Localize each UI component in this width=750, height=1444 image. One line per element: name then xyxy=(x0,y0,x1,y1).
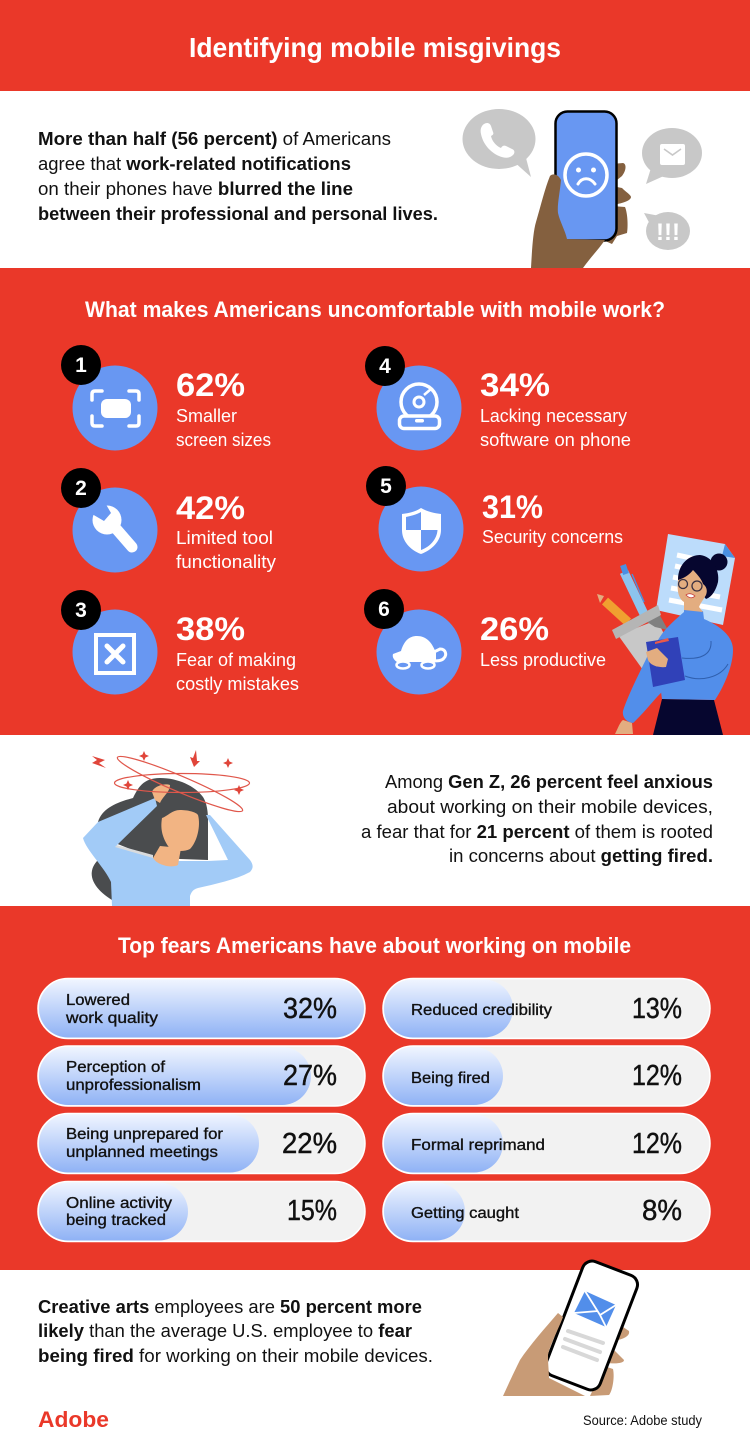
item 5: security concerns: 31% xyxy=(482,489,543,525)
creative arts text block: Creative arts employees are 50 percent more xyxy=(38,1296,422,1317)
bar: formal reprimand: Formal reprimand xyxy=(411,1137,545,1154)
panel: uncomfortable with mobile work xyxy=(0,268,750,735)
icon: hair bun and back hair xyxy=(678,554,728,599)
item 3: fear of costly mistakes: costly mistakes xyxy=(176,673,299,694)
bar: reduced credibility: 13% xyxy=(632,993,682,1025)
bar: formal reprimand: 12% xyxy=(632,1128,682,1160)
icon: left arm xyxy=(623,655,668,723)
bar: lowered work quality xyxy=(38,978,365,1038)
item 3: fear of costly mistakes: 38% xyxy=(176,611,245,647)
icon: cup xyxy=(612,605,672,670)
item 1: smaller screen sizes: 1 xyxy=(75,354,87,377)
item 4: lacking software: Lacking necessary xyxy=(480,405,628,426)
bar: being unprepared: Being unprepared for xyxy=(66,1126,223,1143)
item 2: limited tool functionality: Limited tool xyxy=(176,527,273,548)
bar: lowered work quality: Lowered xyxy=(66,992,130,1009)
bar: reduced credibility: Reduced credibility xyxy=(411,1002,552,1019)
bar: being fired: Being fired xyxy=(411,1070,490,1087)
bar: being fired: 12% xyxy=(632,1060,682,1092)
icon: orbit rings and sparks xyxy=(92,750,250,818)
item 2: limited tool functionality: functionality xyxy=(176,551,277,572)
header band xyxy=(0,0,750,91)
item 3: fear of costly mistakes: 3 xyxy=(75,599,87,622)
icon: face xyxy=(678,570,707,612)
item 1: smaller screen sizes xyxy=(61,345,271,450)
icon: phone with sad face xyxy=(556,112,616,240)
item 4: lacking software: software on phone xyxy=(480,429,631,450)
icon: fingers xyxy=(590,1325,629,1396)
item 1: smaller screen sizes: screen sizes xyxy=(176,429,271,450)
Gen Z text block: Among Gen Z, 26 percent feel anxious xyxy=(385,771,713,792)
icon: alert bubble xyxy=(644,212,690,250)
bar: being fired xyxy=(383,1046,710,1106)
Gen Z text block: about working on their mobile devices, xyxy=(387,796,713,817)
bar: being unprepared xyxy=(38,1114,365,1174)
intro text block: between their professional and personal lives. xyxy=(38,203,438,224)
Gen Z text block: in concerns about getting fired. xyxy=(449,845,713,866)
icon: phone call bubble xyxy=(462,109,536,177)
item 2: limited tool functionality: 42% xyxy=(176,490,245,526)
intro text block: agree that work-related notifications xyxy=(38,153,351,174)
creative arts text block xyxy=(38,1296,433,1366)
item 2: limited tool functionality: 2 xyxy=(75,477,87,500)
icon: hand on clipboard xyxy=(646,648,668,667)
item 5: security concerns: 5 xyxy=(380,475,392,498)
bar: online activity tracked: 15% xyxy=(287,1195,337,1227)
icon: tilted phone xyxy=(543,1258,640,1393)
bar: lowered work quality: 32% xyxy=(283,993,337,1025)
item 4: lacking software: 34% xyxy=(480,367,550,403)
intro text block: More than half (56 percent) of Americans xyxy=(38,128,391,149)
icon: hair xyxy=(98,778,208,860)
source note: Source: Adobe study xyxy=(583,1413,702,1428)
icon: brown hand xyxy=(531,174,605,268)
icon: fingers behind phone xyxy=(603,163,631,244)
item 1: smaller screen sizes: 62% xyxy=(176,367,245,403)
item 3: fear of costly mistakes xyxy=(61,590,299,694)
bar: being unprepared: unplanned meetings xyxy=(66,1144,218,1161)
item 6: less productive: 26% xyxy=(480,611,549,647)
icon: pen xyxy=(623,565,644,614)
icon: skirt xyxy=(653,699,723,735)
item 2: limited tool functionality xyxy=(61,468,277,572)
item 3: fear of costly mistakes: Fear of making xyxy=(176,649,296,670)
icon: face xyxy=(161,810,199,851)
Gen Z text block xyxy=(361,771,713,866)
item 4: lacking software xyxy=(365,346,631,450)
Gen Z text block: a fear that for 21 percent of them is rooted xyxy=(361,821,713,842)
icon: sweater body xyxy=(658,609,733,700)
bar: online activity tracked: Online activity xyxy=(66,1195,172,1212)
item 4: lacking software: 4 xyxy=(379,355,391,378)
icon: hand on head xyxy=(152,784,170,803)
item 5: security concerns: Security concerns xyxy=(482,526,623,547)
illustration: dizzy woman with hands on head xyxy=(83,750,253,906)
bar: lowered work quality: work quality xyxy=(65,1010,158,1027)
creative arts text block: likely than the average U.S. employee to fear xyxy=(38,1320,412,1341)
icon: hand at bottom xyxy=(615,720,633,734)
bar: online activity tracked xyxy=(38,1182,365,1242)
intro text block xyxy=(38,128,438,224)
bar: being unprepared: 22% xyxy=(282,1128,337,1160)
item 6: less productive xyxy=(364,589,606,694)
illustration: hand holding phone with sad face xyxy=(462,109,702,268)
illustration: worried woman with clipboard xyxy=(597,534,735,735)
bar: perception of unprofessionalism: unprofessionalism xyxy=(66,1077,201,1094)
icon: pencil xyxy=(597,594,628,622)
icon: alert bubble: !!! xyxy=(656,219,680,246)
icon: sweater xyxy=(83,798,253,906)
bar: getting caught: 8% xyxy=(642,1195,682,1227)
bar: reduced credibility xyxy=(383,978,710,1038)
bar: perception of unprofessionalism: Perception of xyxy=(66,1059,166,1076)
icon: mail bubble xyxy=(642,128,702,184)
creative arts text block: being fired for working on their mobile devices. xyxy=(38,1345,433,1366)
icon: lower hair xyxy=(92,860,118,900)
logo: Adobe: Adobe xyxy=(38,1407,109,1432)
item 6: less productive: Less productive xyxy=(480,649,606,670)
panel: top fears xyxy=(0,906,750,1270)
heading: What makes Americans uncomfortable with mobile work? xyxy=(85,297,665,322)
illustration: hand holding phone with mail xyxy=(503,1258,640,1396)
bar: perception of unprofessionalism xyxy=(38,1046,365,1106)
item 1: smaller screen sizes: Smaller xyxy=(176,405,237,426)
icon: tan hand xyxy=(503,1313,585,1396)
bar: getting caught xyxy=(383,1182,710,1242)
bar: perception of unprofessionalism: 27% xyxy=(283,1060,337,1092)
heading: Top fears Americans have about working on mobile xyxy=(118,933,631,958)
title: Identifying mobile misgivings xyxy=(189,32,561,63)
icon: grey collar sliver xyxy=(113,844,153,859)
icon: white neck gap xyxy=(208,815,228,860)
icon: neck xyxy=(153,846,181,866)
icon: clipboard xyxy=(646,637,685,687)
item 5: security concerns xyxy=(366,466,623,572)
icon: document xyxy=(656,534,735,625)
intro text block: on their phones have blurred the line xyxy=(38,178,353,199)
item 6: less productive: 6 xyxy=(378,598,390,621)
bar: online activity tracked: being tracked xyxy=(66,1212,166,1229)
bar: getting caught: Getting caught xyxy=(411,1205,520,1222)
bar: formal reprimand xyxy=(383,1114,710,1174)
